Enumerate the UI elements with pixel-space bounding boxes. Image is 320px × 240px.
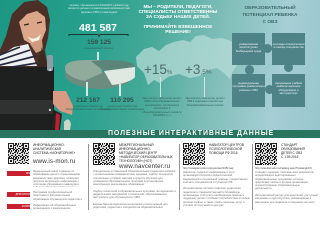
appeal heading (138, 4, 218, 34)
title: ОБРАЗОВАНИЯ (281, 147, 305, 151)
total number: 481 587 (79, 22, 117, 34)
description: Навигатор содержит информацию о сети организаций психолого-педагогической, медицинской и социальной помощи, предоставляет контакты специалистов в субъектах РФ. (183, 171, 248, 184)
column 4: standard (255, 143, 318, 204)
caption: в отдельных классах при общеобразовательных организациях (66, 104, 110, 111)
connector top (263, 44, 272, 53)
puzzle piece: programme (232, 74, 265, 107)
QR codes (8, 143, 277, 165)
title: МЕЖРЕГИОНАЛЬНЫЙ (119, 143, 154, 147)
description: Подбор технологий и образовательных программ, методических и дидактических материалов и технологий, обеспечивающих доступность для обучающихся с ОВЗ. (93, 190, 176, 199)
caption: Увеличилось количество детей с ОВЗ в отдельных классах при общеобразовательных школах (185, 97, 225, 107)
puzzle piece: equipment: специальное учебное реабилитационное оборудование и автотранспорт (275, 82, 302, 95)
red label 2 (7, 192, 30, 196)
title (281, 143, 305, 159)
section band heading (0, 130, 320, 138)
title: МЕТОДИЧЕСКИЙ ЦЕНТР (119, 151, 157, 155)
title: СИСТЕМА «МОНИТОРИНГ» (33, 151, 75, 155)
title (119, 142, 173, 163)
appeal heading: ЗА СУДЬБУ НАШИХ ДЕТЕЙ. ПРИНИМАЙТЕ ВЗВЕШЕННОЕ (144, 14, 212, 29)
title: С 1.09.2016 (281, 155, 298, 159)
count: 212 167 (76, 96, 100, 104)
inclusive count: 159 125 (87, 39, 111, 46)
description: Определение оптимальной образовательной траектории ребенка с ограниченными возможностями здоровья, подбор технологий, специальных условий, методик и средств обучения для проведения образовательных программ в организациях, реализующих инклюзивное образование. (93, 170, 175, 186)
caption: в отдельных классах при общеобразовательных организациях (100, 104, 144, 111)
inclusive caption: в инклюзивных классах (85, 46, 113, 50)
puzzle piece: environment: универсальная архитектурная безбарьерная среда (236, 43, 261, 53)
puzzle piece: environment (232, 33, 265, 65)
statistic: special classes (66, 96, 110, 111)
stem (160, 77, 161, 97)
QR 3 (183, 143, 205, 165)
puzzle piece: programme: индивидуальная программа реабилитации ребенка с ОВЗ (232, 82, 265, 92)
map of Russia (136, 35, 237, 85)
description (93, 170, 176, 210)
red label 3: КОМП (22, 204, 30, 208)
puzzle piece: consultations (272, 33, 305, 65)
description: Интерактивная система позволяет родителям, педагогам и специалистам найти ближайшую организацию и получить необходимую помощь и поддержку детям с особыми потребностями в любом регионе страны, а также узнать перечень услуг и условия их получения в центрах (183, 187, 250, 207)
title: ИНФОРМАЦИОННО- (119, 147, 151, 151)
connector bottom (265, 85, 274, 94)
QR 2 (93, 143, 115, 165)
red label 1 (7, 171, 30, 176)
column 3: centres navigator (183, 143, 250, 207)
statistic: special schools (100, 96, 144, 111)
section band heading: ПОЛЕЗНЫЕ ИНТЕРАКТИВНЫЕ ДАННЫЕ (108, 130, 274, 137)
description (255, 171, 318, 204)
description: Стандарт содержит перечень всех документов, определяющих адаптированные образовательные программы, которые предлагают школы и детские организации, осуществляющие образовательную деятельность. (255, 171, 314, 190)
link: http://standart.edu.ru/catalog.aspx?CatalogId=6 (255, 166, 312, 170)
appeal heading: СПЕЦИАЛИСТЫ ОТВЕТСТВЕННЫ (139, 9, 217, 14)
stem (204, 77, 205, 97)
connector left (245, 65, 254, 75)
caption: Увеличилось количество детей с ОВЗ в общеобразовательных организациях, обучающихся инклюзивно в общеобразовательных школах в 2014/2015 уч. г. (142, 97, 182, 117)
red label 3 (7, 204, 30, 209)
potential heading (242, 4, 298, 24)
brace (68, 34, 128, 38)
title: «НАВИГАТОР ОБРАЗОВАТЕЛЬНЫХ (119, 155, 173, 159)
title: АНАЛИТИЧЕСКАЯ (33, 147, 61, 151)
potential heading: ОБРАЗОВАТЕЛЬНЫЙ (244, 6, 296, 10)
title: СТАНДАРТ (281, 143, 298, 147)
value: +15% (144, 62, 172, 76)
statistic: total students (68, 4, 130, 50)
url: www.is-mon.ru (33, 158, 76, 165)
column divider 1 (88, 144, 89, 210)
column 2: navigator (93, 142, 176, 210)
connector right (284, 63, 293, 72)
title: ТЕХНОЛОГИЙ» (НОТ) (119, 159, 152, 163)
photo: girl in wheelchair (0, 0, 73, 130)
title: НАВИГАТОР ЦЕНТРОВ ПСИХОЛОГИЧЕСКОЙ ПОМОЩИ РФ 2015 (209, 143, 244, 155)
puzzle diagram (232, 33, 305, 107)
growth stat 15 percent (142, 62, 182, 117)
red label 2: ДПК/НПОЗ (16, 192, 30, 196)
red label 1: ФЗ (26, 171, 30, 175)
description: Интерактивный ресурс для родителей, доступный ежедневно и круглосуточно, рекомендации и материалы для педагогов и специалистов школ (255, 194, 318, 204)
potential heading: ПОТЕНЦИАЛ РЕБЕНКА (243, 12, 297, 18)
QR 4 (255, 143, 277, 165)
column 1: monitoring system (7, 143, 82, 210)
intro text: человек, обучающихся в 2014/2015 учебном году являются детьми с ограниченными возможностями здоровья (ОВЗ) и инвалидами (68, 4, 130, 14)
potential heading: С ОВЗ (263, 20, 277, 24)
appeal heading: МЫ – РОДИТЕЛИ, ПЕДАГОГИ, (143, 4, 213, 9)
appeal heading: РЕШЕНИЕ! (165, 29, 191, 34)
puzzle piece: equipment (272, 74, 305, 107)
title: ИНФОРМАЦИОННО- (33, 143, 65, 147)
title: ДЕТЕЙ С ОВЗ (281, 151, 302, 155)
teal background panel (0, 0, 320, 130)
pie chart (65, 52, 135, 96)
link: http://navigator.edu.ru/psycenter2015/map (183, 166, 233, 170)
puzzle piece: consultations: логопеды и консультации и помощь специалистов (273, 43, 304, 49)
description (183, 171, 250, 207)
title (33, 143, 76, 155)
QR 1 (8, 143, 29, 164)
growth stat 3.5 percent (185, 62, 225, 107)
value: +3,5% (185, 62, 212, 76)
count: 110 295 (110, 96, 134, 104)
column divider 3 (252, 144, 253, 210)
url: www.navcenter.ru (119, 163, 170, 170)
column divider 2 (179, 144, 180, 210)
